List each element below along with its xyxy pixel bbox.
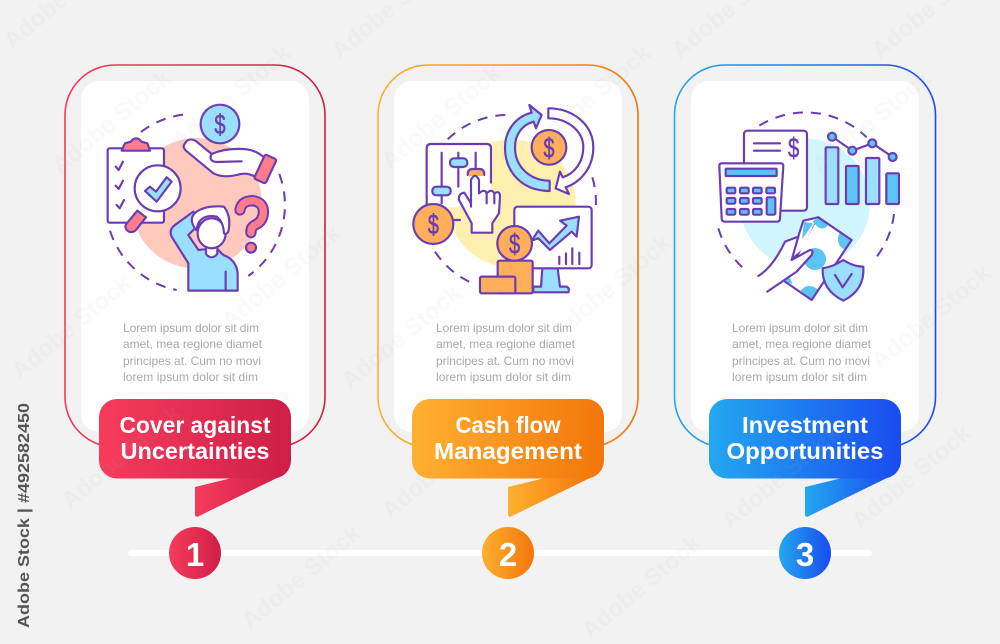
text: Adobe Stock	[867, 259, 997, 375]
panel 3 body text	[732, 321, 872, 384]
text: Adobe Stock	[237, 519, 367, 635]
panel 3 heading banner: Investment	[742, 412, 868, 438]
text: Adobe Stock	[527, 39, 657, 155]
panel 3 banner tail	[805, 476, 891, 517]
icon: cash flow: $	[428, 210, 439, 241]
panel 2 body text: Lorem ipsum dolor sit dim	[436, 321, 572, 335]
text: Adobe Stock	[217, 219, 347, 335]
panel 1 heading banner: Uncertainties	[120, 438, 270, 464]
text: Adobe Stock	[337, 279, 467, 395]
text: Adobe Stock	[807, 64, 937, 180]
panel: investment opportunities	[674, 65, 936, 579]
icon: investment	[718, 112, 899, 301]
panel 2 white card	[394, 81, 622, 432]
text: Adobe Stock	[847, 419, 977, 535]
icon: cash flow: $	[509, 229, 521, 260]
panel 1 outline	[65, 65, 325, 447]
icon: investment: $	[788, 133, 800, 164]
panel 3 outline	[674, 65, 936, 447]
step number 1	[169, 527, 221, 579]
panel 2 heading banner: Management	[434, 438, 582, 464]
icon: uncertainty cover	[108, 105, 285, 291]
icon: cash flow: $	[543, 133, 555, 164]
panel 1 heading banner: Cover against	[120, 412, 271, 438]
panel 3 heading banner	[709, 399, 901, 478]
timeline line	[128, 550, 872, 556]
text: Adobe Stock	[7, 269, 137, 385]
panel 2 heading banner	[412, 399, 604, 478]
panel 2 body text: amet, mea regione diamet	[436, 337, 576, 351]
panel 3 body text: amet, mea regione diamet	[732, 337, 872, 351]
icon: cash flow	[413, 105, 596, 293]
panel: cover against uncertainties	[65, 65, 325, 579]
panel 3 body text: Lorem ipsum dolor sit dim	[732, 321, 868, 335]
panel: cash flow management	[378, 65, 638, 579]
panel 2 body text: principes at. Cum no movi	[436, 354, 574, 368]
panel 1 body text: amet, mea regione diamet	[123, 337, 263, 351]
panel 2 body text	[436, 321, 576, 384]
text: Adobe Stock	[577, 529, 707, 644]
panel 3 heading banner: Opportunities	[726, 438, 884, 464]
panel 2 body text: lorem ipsum dolor sit dim	[436, 370, 571, 384]
panel 3 body text: principes at. Cum no movi	[732, 354, 870, 368]
text: Adobe Stock	[167, 39, 297, 155]
text: Adobe Stock	[47, 64, 177, 180]
step number 1: 1	[186, 536, 204, 573]
panel 1 heading banner	[99, 399, 291, 478]
panel 2 heading banner: Cash flow	[456, 412, 561, 438]
step number 3: 3	[796, 536, 814, 573]
panel 1 white card	[81, 81, 309, 432]
text: Adobe Stock	[717, 419, 847, 535]
panel 1 body text	[123, 321, 263, 384]
stock credit vertical text: Adobe Stock | #492582450	[16, 403, 33, 628]
text: Adobe Stock	[377, 59, 507, 175]
panel 3 body text: lorem ipsum dolor sit dim	[732, 370, 867, 384]
panel 1 body text: Lorem ipsum dolor sit dim	[123, 321, 259, 335]
text: Adobe Stock	[547, 229, 677, 345]
step number 2: 2	[499, 536, 517, 573]
panel 1 body text: lorem ipsum dolor sit dim	[123, 370, 258, 384]
text: Adobe Stock	[377, 409, 507, 525]
step number 3	[779, 527, 831, 579]
text: Adobe Stock	[57, 399, 187, 515]
panel 2 banner tail	[508, 476, 594, 517]
panel 1 banner tail	[195, 476, 281, 517]
panel 3 white card	[691, 81, 919, 432]
panel 1 body text: principes at. Cum no movi	[123, 354, 261, 368]
step number 2	[482, 527, 534, 579]
icon: uncertainty cover: $	[214, 110, 226, 141]
panel 2 outline	[378, 65, 638, 447]
